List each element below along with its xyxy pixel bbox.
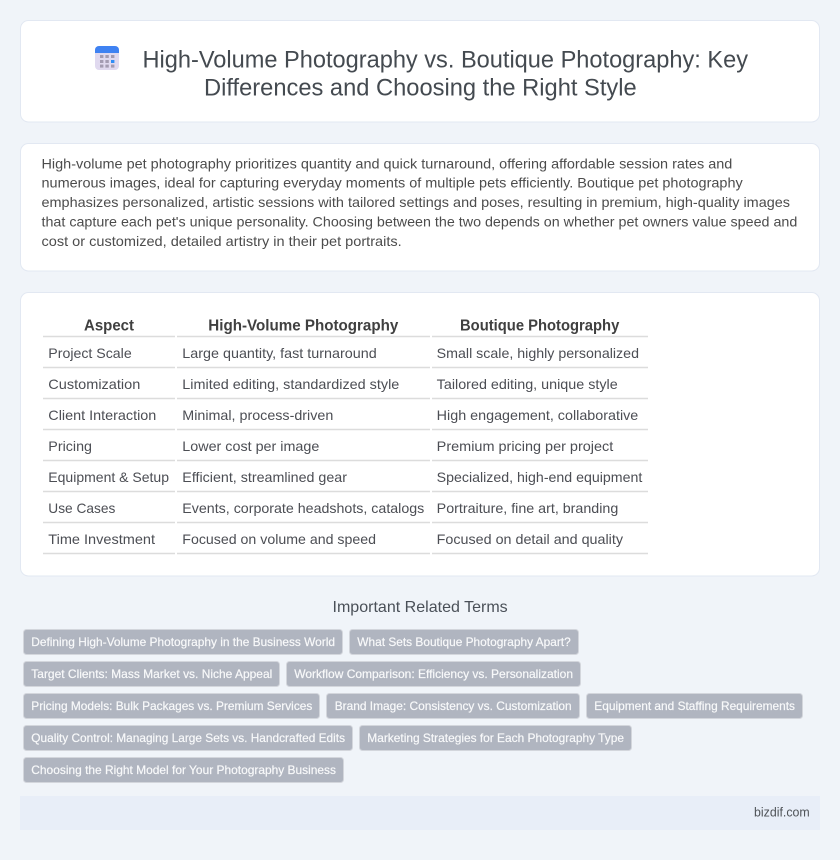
table row: use cases [43,500,648,522]
table header row [43,318,648,336]
table row: customization: Tailored editing, unique style [437,376,618,392]
tag: defining high-volume photography [24,630,342,654]
panel: introduction [20,144,820,271]
tag: quality control: Quality Control: Managing Large Sets vs. Handcrafted Edits [31,731,345,745]
table row: use cases: Events, corporate headshots, catalogs [182,500,424,516]
icon: calendar grid [95,46,119,70]
table row: equipment and setup: Specialized, high-end equipment [437,469,642,485]
table row: pricing: Lower cost per image [182,438,320,454]
footer [20,796,820,830]
tag: equipment and staffing: Equipment and Staffing Requirements [594,699,795,713]
text block: introduction paragraph: High-volume pet photography prioritizes quantity and quick turnaround, offering affordable session rates and [42,155,732,171]
table header row: Aspect [84,318,135,335]
title: High-Volume Photography vs. Boutique Photography: Key [142,46,748,73]
table row: client interaction [43,407,648,430]
table row: time investment: Focused on detail and quality [437,531,623,547]
text block: introduction paragraph [42,155,797,249]
panel: header [20,20,820,122]
table row: project scale: Project Scale [48,345,132,361]
table row: pricing: Premium pricing per project [437,438,613,454]
tag: workflow comparison: Workflow Comparison: Efficiency vs. Personalization [294,667,573,681]
panel: comparison table [20,292,820,576]
tag: target clients [24,662,280,686]
tag: choosing the right model: Choosing the Right Model for Your Photography Business [31,763,336,777]
table row: customization: Limited editing, standardized style [182,376,400,392]
tag: workflow comparison [286,662,580,686]
table row: client interaction: Minimal, process-driven [182,407,333,423]
table row: time investment [43,531,648,554]
table row: time investment: Time Investment [48,531,155,547]
panel: related term tags [24,630,802,782]
title [142,46,748,102]
table row: use cases: Portraiture, fine art, branding [437,500,618,516]
tag: equipment and staffing [586,694,802,718]
tag: quality control [24,726,352,750]
table row: project scale [43,345,648,368]
tag: pricing models [24,694,320,718]
table row: project scale: Small scale, highly personalized [437,345,639,361]
table row: pricing [43,438,648,460]
table row: customization: Customization [48,376,140,392]
table row: customization [43,376,648,398]
tag: brand image: Brand Image: Consistency vs. Customization [335,699,572,713]
tag: marketing strategies: Marketing Strategies for Each Photography Type [367,731,624,745]
table row: equipment and setup: Equipment & Setup [48,469,169,485]
table row: client interaction: High engagement, collaborative [437,407,639,423]
tag: pricing models: Pricing Models: Bulk Packages vs. Premium Services [31,699,312,713]
table row: equipment and setup [43,469,648,492]
text block: introduction paragraph: that capture each pet's unique personality. Choosing between the two depends on whether pet owners value speed and [42,214,797,230]
tag: choosing the right model [24,758,344,782]
table header row: High-Volume Photography [208,318,398,335]
table row: client interaction: Client Interaction [48,407,156,423]
table row: pricing: Pricing [48,438,92,454]
table header row: Boutique Photography [460,318,619,335]
tag: defining high-volume photography: Defining High-Volume Photography in the Business World [31,635,335,649]
title: Differences and Choosing the Right Style [204,75,637,102]
text block: introduction paragraph: numerous images, ideal for capturing everyday moments of multiple pets efficiently. Boutique pet photography [42,175,743,191]
text block: introduction paragraph: cost or customized, detailed artistry in their pet portraits. [42,233,402,249]
text block: introduction paragraph: emphasizes personalized, artistic sessions with tailored settings and poses, resulting in premium, high-quality images [42,194,790,210]
table row: project scale: Large quantity, fast turnaround [182,345,377,361]
tag: marketing strategies [360,726,632,750]
table row: equipment and setup: Efficient, streamlined gear [182,469,347,485]
tag: boutique photography: What Sets Boutique Photography Apart? [357,635,571,649]
tag: target clients: Target Clients: Mass Market vs. Niche Appeal [31,667,272,681]
tag: boutique photography [350,630,578,654]
table row: use cases: Use Cases [48,500,115,516]
tag: brand image [326,694,580,718]
heading: important related terms: Important Related Terms [332,599,508,616]
footer: bizdif.com [754,805,810,820]
table row: time investment: Focused on volume and speed [182,531,376,547]
